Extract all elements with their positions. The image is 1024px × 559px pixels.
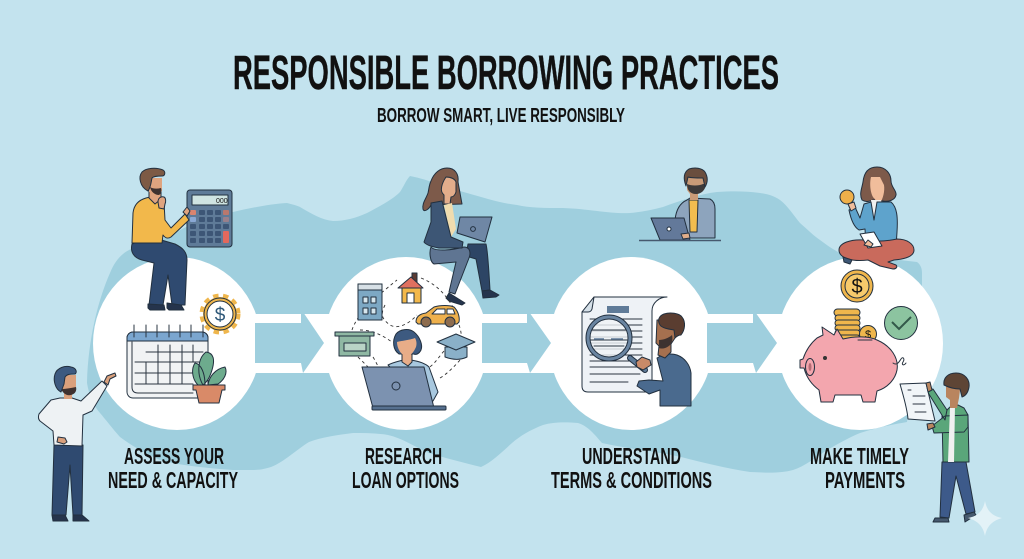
label: step 1	[108, 443, 238, 493]
figure: woman seated with coin	[839, 167, 914, 269]
magnifier	[586, 315, 645, 370]
label: step 2: RESEARCH	[365, 443, 442, 469]
dashed connections	[352, 278, 464, 378]
icon: falling dollar coin: $	[851, 276, 863, 298]
icon: piggy bank with coins: $	[865, 329, 871, 341]
person at laptop	[362, 330, 446, 410]
label: step 3: UNDERSTAND	[582, 443, 681, 469]
figure: woman with laptop	[423, 168, 499, 305]
icon: green check	[884, 306, 918, 340]
figure: man with paper	[900, 373, 976, 522]
icon: calendar, gear and plant	[127, 297, 237, 403]
icon: house	[398, 273, 423, 303]
icon: sparkle	[968, 501, 1002, 536]
background blob	[87, 176, 922, 473]
subtitle: BORROW SMART, LIVE RESPONSIBLY	[377, 105, 625, 127]
icon: document with magnifier and reviewer	[582, 297, 691, 406]
icon group: loan options	[335, 273, 475, 410]
label: step 4	[810, 443, 909, 493]
figure: man pointing	[38, 366, 116, 521]
arrow 2	[482, 309, 551, 373]
icon: app panel	[358, 284, 382, 320]
calculator	[187, 190, 232, 247]
arrow 3	[707, 309, 777, 373]
label: step 2: LOAN OPTIONS	[352, 467, 459, 493]
label: step 1: ASSESS YOUR	[124, 443, 224, 469]
figure: man with calculator	[131, 168, 232, 310]
icon: gear with dollar: $	[215, 305, 226, 326]
figure: man at laptop on desk	[639, 168, 721, 240]
process flow: circles and arrows	[93, 257, 943, 430]
reviewer	[636, 313, 691, 406]
label: step 4: PAYMENTS	[825, 467, 905, 493]
calculator: 000	[216, 198, 228, 205]
arrow 1	[255, 309, 324, 373]
icon: car	[416, 306, 459, 327]
coin stack	[834, 309, 876, 342]
icon: graduation cap	[437, 334, 475, 359]
icon: piggy bank with coins	[800, 270, 918, 402]
label: step 2	[352, 443, 459, 493]
label: step 4: MAKE TIMELY	[810, 443, 909, 469]
label: step 1: NEED & CAPACITY	[108, 467, 238, 493]
label: step 3	[551, 443, 712, 493]
icon: bank	[335, 332, 374, 356]
label: step 3: TERMS & CONDITIONS	[551, 467, 712, 493]
pig	[800, 327, 906, 402]
